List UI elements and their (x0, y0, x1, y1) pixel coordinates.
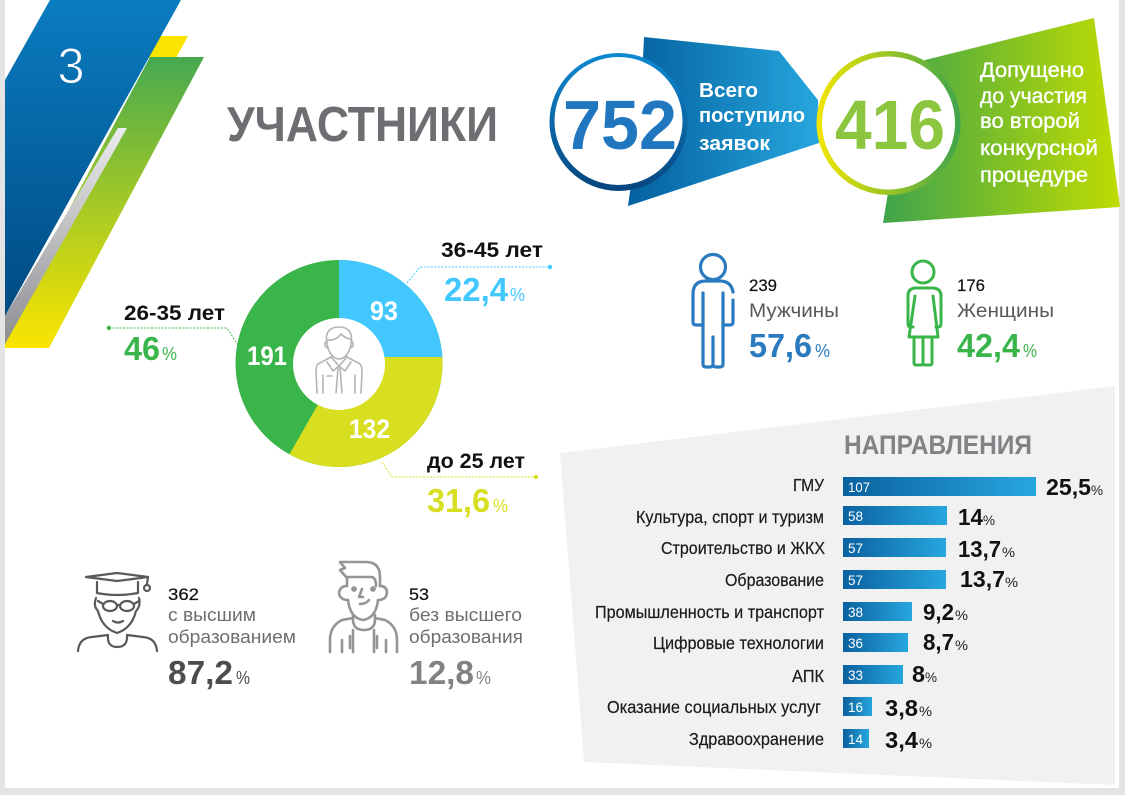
stat: higher education: с высшим (168, 605, 256, 625)
stat: no higher education: % (476, 668, 491, 688)
bar row: culture, sport and tourism: 58 (848, 508, 863, 524)
label: 26-35 years: 26-35 лет (124, 301, 225, 325)
callout: admitted participants: 416 (835, 86, 945, 164)
bar row: education (725, 566, 1018, 592)
icon: graduate (78, 573, 157, 651)
stat: men: 239 (749, 276, 777, 295)
bar row: education: 57 (848, 572, 863, 588)
bar row: social services: % (919, 703, 932, 719)
label: under 25 years (382, 449, 538, 519)
label: 26-35 years: 46 (124, 330, 160, 367)
donut chart: age: 191 (247, 341, 287, 371)
label: 26-35 years (107, 301, 238, 367)
bar row: digital technologies: 8,7 (923, 629, 954, 655)
bar row: construction and housing (661, 536, 1015, 562)
section number: 3 (58, 38, 84, 94)
callout: admitted participants: во второй (980, 110, 1080, 133)
stat: men (749, 276, 839, 364)
bar row: digital technologies: 36 (848, 635, 863, 651)
heading: directions: НАПРАВЛЕНИЯ (844, 430, 1032, 460)
stat: higher education (168, 585, 296, 691)
bar row: culture, sport and tourism (636, 504, 995, 530)
stat: no higher education: образования (409, 627, 523, 647)
label: under 25 years: % (493, 496, 508, 516)
stat: higher education: % (236, 668, 250, 688)
callout: total applications: 752 (563, 86, 677, 164)
bar row: construction and housing: 57 (848, 540, 863, 556)
stat: higher education: 87,2 (168, 654, 233, 691)
stat: women: % (1023, 341, 1037, 361)
bar row: agriculture: 33 (848, 667, 863, 683)
bar row: industry and transport: 38 (848, 604, 863, 620)
bar row: healthcare: 3,4 (885, 727, 918, 753)
icon: woman (908, 261, 941, 365)
bar row: digital technologies: Цифровые технологии (653, 633, 824, 653)
bar row: healthcare: % (919, 735, 932, 751)
bar row: culture, sport and tourism: % (983, 512, 995, 528)
bar row: agriculture: АПК (792, 666, 825, 686)
callout: total applications: Всего (699, 79, 758, 102)
callout: admitted participants: процедуре (980, 164, 1088, 187)
bar row: education: 13,7 (960, 566, 1005, 592)
callout: total applications: поступило (699, 104, 805, 127)
bar row: healthcare: Здравоохранение (689, 729, 824, 749)
stat: men: 57,6 (749, 327, 812, 364)
icon: person in shirt (316, 327, 362, 393)
stat: men: Мужчины (749, 301, 839, 322)
bar row: industry and transport: 9,2 (923, 599, 954, 625)
stat: no higher education: 53 (409, 585, 429, 604)
stat: women (957, 276, 1054, 364)
bar row: industry and transport: Промышленность и транспорт (595, 602, 824, 622)
bar row: industry and transport (595, 599, 968, 625)
bar row: ГМУ (793, 474, 1103, 500)
label: 26-35 years: % (162, 344, 177, 364)
bar row: culture, sport and tourism: Культура, спорт и туризм (636, 507, 824, 527)
stat: women: 42,4 (957, 327, 1021, 364)
callout: admitted participants: до участия (980, 85, 1087, 108)
bar row: agriculture: % (925, 669, 937, 685)
label: 36-45 years: 22,4 (444, 271, 509, 308)
callout: admitted participants: Допущено (980, 59, 1084, 82)
stat: no higher education: 12,8 (409, 654, 474, 691)
donut chart: age: 132 (349, 414, 390, 444)
stat: no higher education (409, 585, 523, 691)
stat: women: 176 (957, 276, 985, 295)
donut chart: age (236, 260, 442, 467)
title: УЧАСТНИКИ (227, 98, 498, 152)
label: 36-45 years: 36-45 лет (441, 238, 543, 262)
bar row: education: Образование (725, 570, 824, 590)
bar row: ГМУ: % (1091, 482, 1103, 498)
callout: admitted participants (816, 18, 1120, 223)
stat: men: % (815, 341, 830, 361)
bar row: digital technologies: % (955, 637, 968, 653)
label: 36-45 years (407, 238, 552, 308)
stat: no higher education: без высшего (409, 605, 522, 625)
label: 36-45 years: % (510, 285, 525, 305)
panel: directions (560, 386, 1115, 785)
callout: total applications (550, 37, 819, 206)
label: under 25 years: до 25 лет (427, 449, 525, 473)
bar row: social services (607, 695, 932, 721)
bar row: ГМУ: 25,5 (1046, 474, 1091, 500)
bar row: construction and housing: Строительство и ЖКХ (661, 538, 825, 558)
callout: total applications: заявок (699, 132, 771, 155)
icon: student (330, 562, 397, 652)
bar row: ГМУ: 107 (848, 479, 870, 495)
bar row: social services: Оказание социальных услуг (607, 697, 821, 717)
bar row: construction and housing: % (1002, 544, 1015, 560)
bar row: healthcare: 14 (848, 731, 863, 747)
bar row: construction and housing: 13,7 (958, 536, 1001, 562)
bar row: education: % (1005, 574, 1018, 590)
bar row: digital technologies (653, 629, 968, 655)
bar row: agriculture: 8 (912, 661, 925, 687)
bar row: culture, sport and tourism: 14 (958, 504, 983, 530)
label: under 25 years: 31,6 (427, 482, 490, 519)
stat: higher education: 362 (168, 585, 199, 604)
bar row: ГМУ: ГМУ (793, 475, 825, 495)
callout: admitted participants: конкурсной (980, 137, 1098, 160)
donut chart: age: 93 (370, 296, 398, 326)
stat: higher education: образованием (168, 627, 296, 647)
stat: women: Женщины (957, 301, 1054, 322)
decorative corner shapes (5, 0, 204, 348)
bar row: industry and transport: % (955, 607, 968, 623)
icon: man (693, 254, 733, 367)
bar row: agriculture (792, 661, 937, 687)
bar row: social services: 16 (848, 699, 863, 715)
bar row: social services: 3,8 (885, 695, 918, 721)
bar row: healthcare (689, 727, 932, 753)
